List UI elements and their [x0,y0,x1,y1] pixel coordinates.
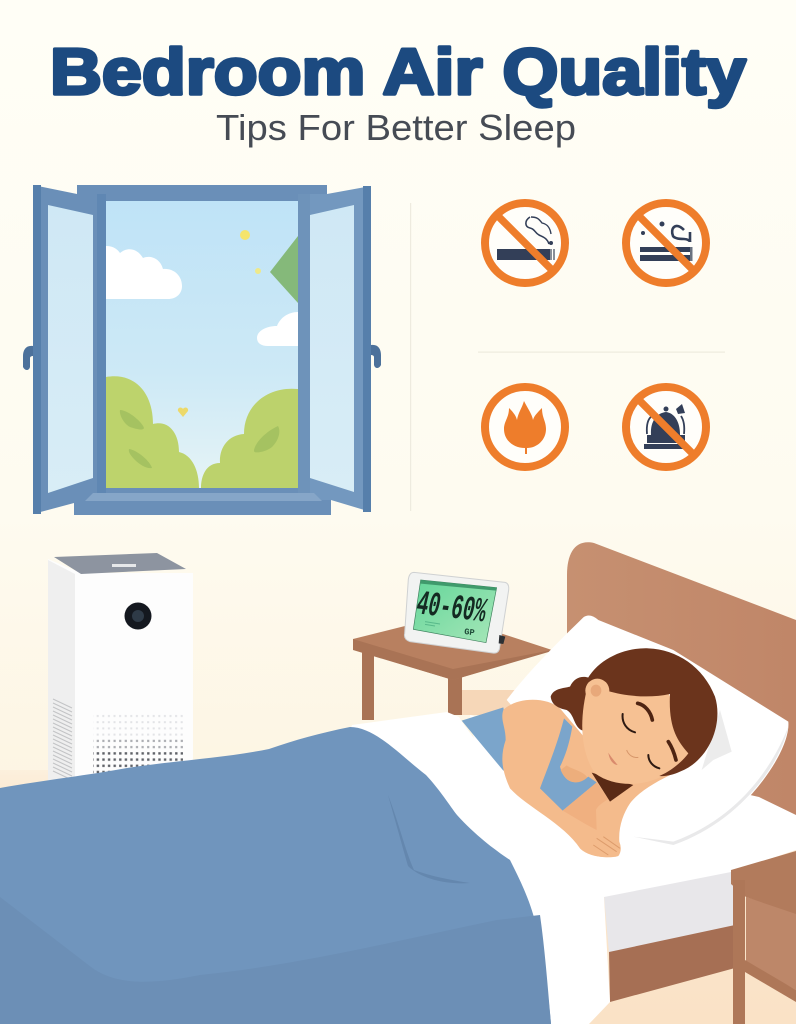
purifier side [48,560,75,790]
window sill [74,493,331,515]
arm and shoulder [502,700,673,857]
table top [731,851,796,914]
mattress side [604,869,735,953]
back panel [462,690,520,715]
hygrometer display [404,572,509,653]
hand [580,835,620,857]
title: Bedroom Air Quality [50,35,746,108]
sleeping woman [462,648,717,857]
sheet fold over shoulder [340,712,610,1024]
bed base [609,925,735,1002]
nose [627,750,638,758]
subtitle: Tips For Better Sleep [216,107,576,148]
blanket left fold [0,897,91,1024]
humidity reading: 40-60% [412,586,490,632]
headboard [567,542,796,830]
closed eyes [623,714,659,768]
purifier top [54,553,186,574]
chest [563,782,630,830]
horizontal divider [478,352,725,353]
face [582,683,690,784]
hygrometer display: GP [464,627,475,638]
purifier button [124,602,152,630]
mattress top [470,715,796,897]
air purifier [48,553,193,790]
floor [0,770,796,1024]
lower rail [745,960,796,1002]
icon: no vaping [626,203,706,283]
window frame [77,185,327,500]
hair bun [551,677,593,733]
blanket crease [388,795,470,883]
open window illustration [23,185,381,515]
left shutter [23,185,106,514]
blue top [462,707,513,771]
right nightstand [731,851,796,1024]
neck shadow [592,773,633,802]
mattress [470,715,796,1002]
vertical divider [410,203,411,511]
ear [585,679,609,703]
blanket lower shade [91,915,551,1024]
leg [733,880,745,1024]
mouth [608,753,618,765]
drawer panel [746,897,796,990]
pillow [507,616,788,847]
icon: flame [485,387,565,467]
legs [362,650,462,720]
table top [353,626,552,680]
purifier body [48,559,193,790]
view through window [106,201,298,488]
hair [586,648,717,776]
front vent dots [93,712,183,780]
right shutter [298,186,381,512]
blanket [0,727,551,1024]
brows [638,703,676,760]
left nightstand [353,626,552,720]
side vent [53,699,72,780]
icon: no aerosol [626,387,706,467]
blue strap [540,718,597,811]
icon: no smoking [485,203,565,283]
